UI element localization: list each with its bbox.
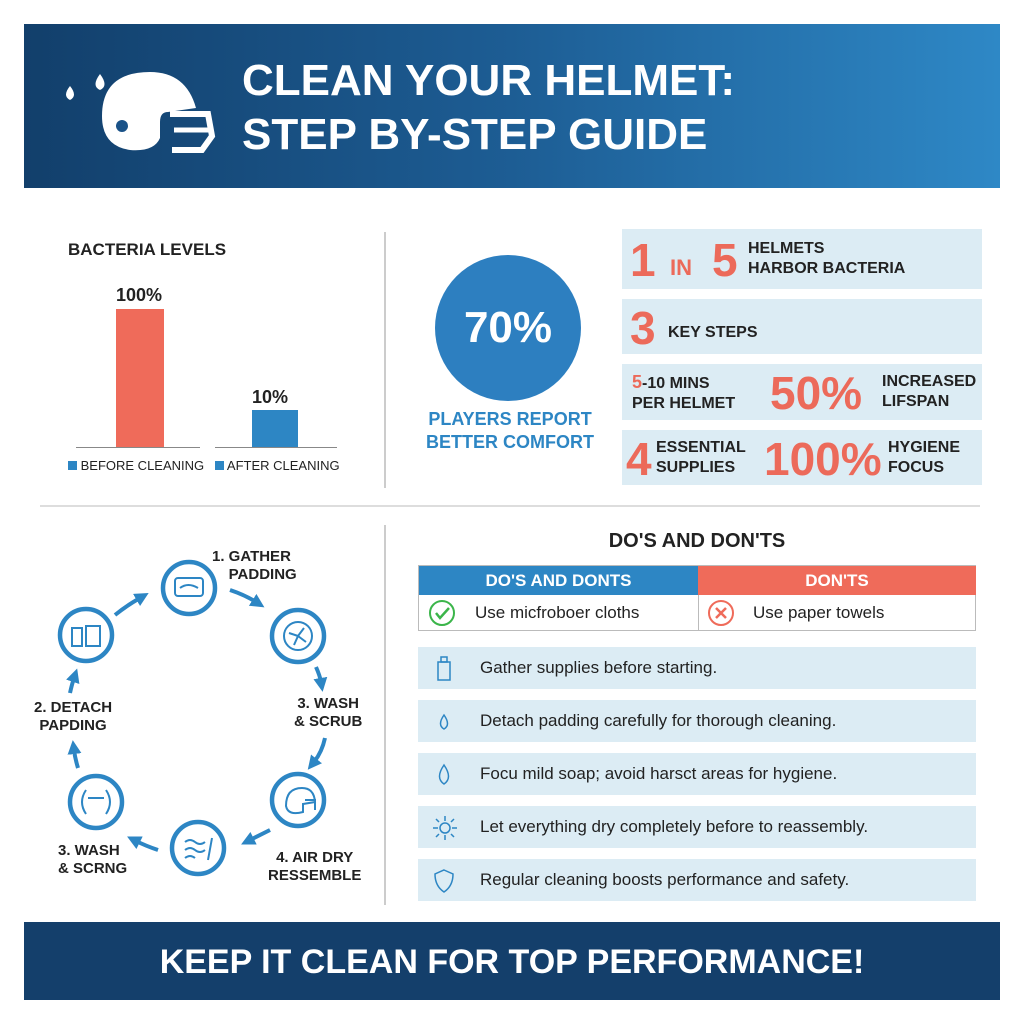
stat: supplies and hygiene: FOCUS xyxy=(888,459,944,476)
stat: minutes and lifespan: INCREASED xyxy=(882,373,976,390)
panel: bacteria chart: 100% xyxy=(116,285,162,305)
tip rows: Gather supplies before starting. xyxy=(480,658,717,677)
dos and donts table: Use micfroboer cloths xyxy=(475,603,639,622)
stat: minutes and lifespan: LIFSPAN xyxy=(882,393,949,410)
stat: 3 key steps: KEY STEPS xyxy=(668,324,758,341)
text: 3. WASH xyxy=(297,695,359,712)
header banner xyxy=(24,24,1000,188)
text: & SCRUB xyxy=(294,713,362,730)
panel: bacteria chart: BEFORE CLEANING xyxy=(81,458,204,473)
stat: 1 in 5: HELMETS xyxy=(748,240,824,257)
dos and donts heading: DO'S AND DON'TS xyxy=(609,530,785,552)
panel: bacteria chart xyxy=(68,240,340,473)
dos and donts table: Use paper towels xyxy=(753,603,884,622)
panel: bacteria chart: BACTERIA LEVELS xyxy=(68,240,226,259)
stat: 1 in 5: HARBOR BACTERIA xyxy=(748,260,905,277)
stat: 1 in 5: 1 xyxy=(630,234,656,286)
text: 2. DETACH xyxy=(34,699,112,716)
panel: bacteria chart: 10% xyxy=(252,387,288,407)
dos and donts table xyxy=(418,565,976,631)
stat: 70% circle: 70% xyxy=(464,303,552,352)
stat: supplies and hygiene: ESSENTIAL xyxy=(656,439,746,456)
stat: supplies and hygiene: SUPPLIES xyxy=(656,459,735,476)
stat: 70% circle: PLAYERS REPORT xyxy=(428,409,592,429)
stat: 70% circle: BETTER COMFORT xyxy=(426,432,594,452)
stat: supplies and hygiene: 4 xyxy=(626,433,652,485)
cycle labels xyxy=(212,548,297,583)
tip rows xyxy=(418,647,976,689)
stat: minutes and lifespan xyxy=(622,364,982,420)
text: & SCRNG xyxy=(58,860,127,877)
stat: minutes and lifespan: PER HELMET xyxy=(632,395,735,412)
stat: 1 in 5 xyxy=(622,229,982,289)
stat: 3 key steps xyxy=(622,299,982,354)
text: Regular cleaning boosts performance and safety. xyxy=(480,870,849,889)
stat: minutes and lifespan: 5-10 MINS xyxy=(632,372,710,392)
icon: helmet with drops xyxy=(66,72,216,153)
stat: supplies and hygiene xyxy=(622,430,982,485)
title: CLEAN YOUR HELMET: xyxy=(242,56,735,105)
dos and donts table: DON'TS xyxy=(805,571,869,590)
text: Let everything dry completely before to reassembly. xyxy=(480,817,868,836)
footer banner xyxy=(24,922,1000,1000)
stat: supplies and hygiene: 100% xyxy=(764,433,882,485)
footer banner: KEEP IT CLEAN FOR TOP PERFORMANCE! xyxy=(160,943,864,981)
stat: supplies and hygiene: HYGIENE xyxy=(888,439,960,456)
title: STEP BY-STEP GUIDE xyxy=(242,110,707,159)
text: 3. WASH xyxy=(58,842,120,859)
stat: 1 in 5: IN xyxy=(670,255,692,280)
cycle labels: PADDING xyxy=(229,566,297,583)
cycle diagram xyxy=(58,560,328,876)
text: Detach padding carefully for thorough cleaning. xyxy=(480,711,836,730)
text: Focu mild soap; avoid harsct areas for hygiene. xyxy=(480,764,837,783)
dos and donts table: DO'S AND DONTS xyxy=(485,571,632,590)
text: RESSEMBLE xyxy=(268,867,361,884)
stat: 3 key steps: 3 xyxy=(630,302,656,354)
text: 4. AIR DRY xyxy=(276,849,353,866)
cycle labels: 1. GATHER xyxy=(212,548,291,565)
title xyxy=(242,56,735,159)
stat: 70% circle xyxy=(426,255,594,452)
stat: minutes and lifespan: 50% xyxy=(770,367,862,419)
text: PAPDING xyxy=(39,717,107,734)
panel: bacteria chart: AFTER CLEANING xyxy=(227,458,340,473)
stat: 1 in 5: 5 xyxy=(712,234,738,286)
